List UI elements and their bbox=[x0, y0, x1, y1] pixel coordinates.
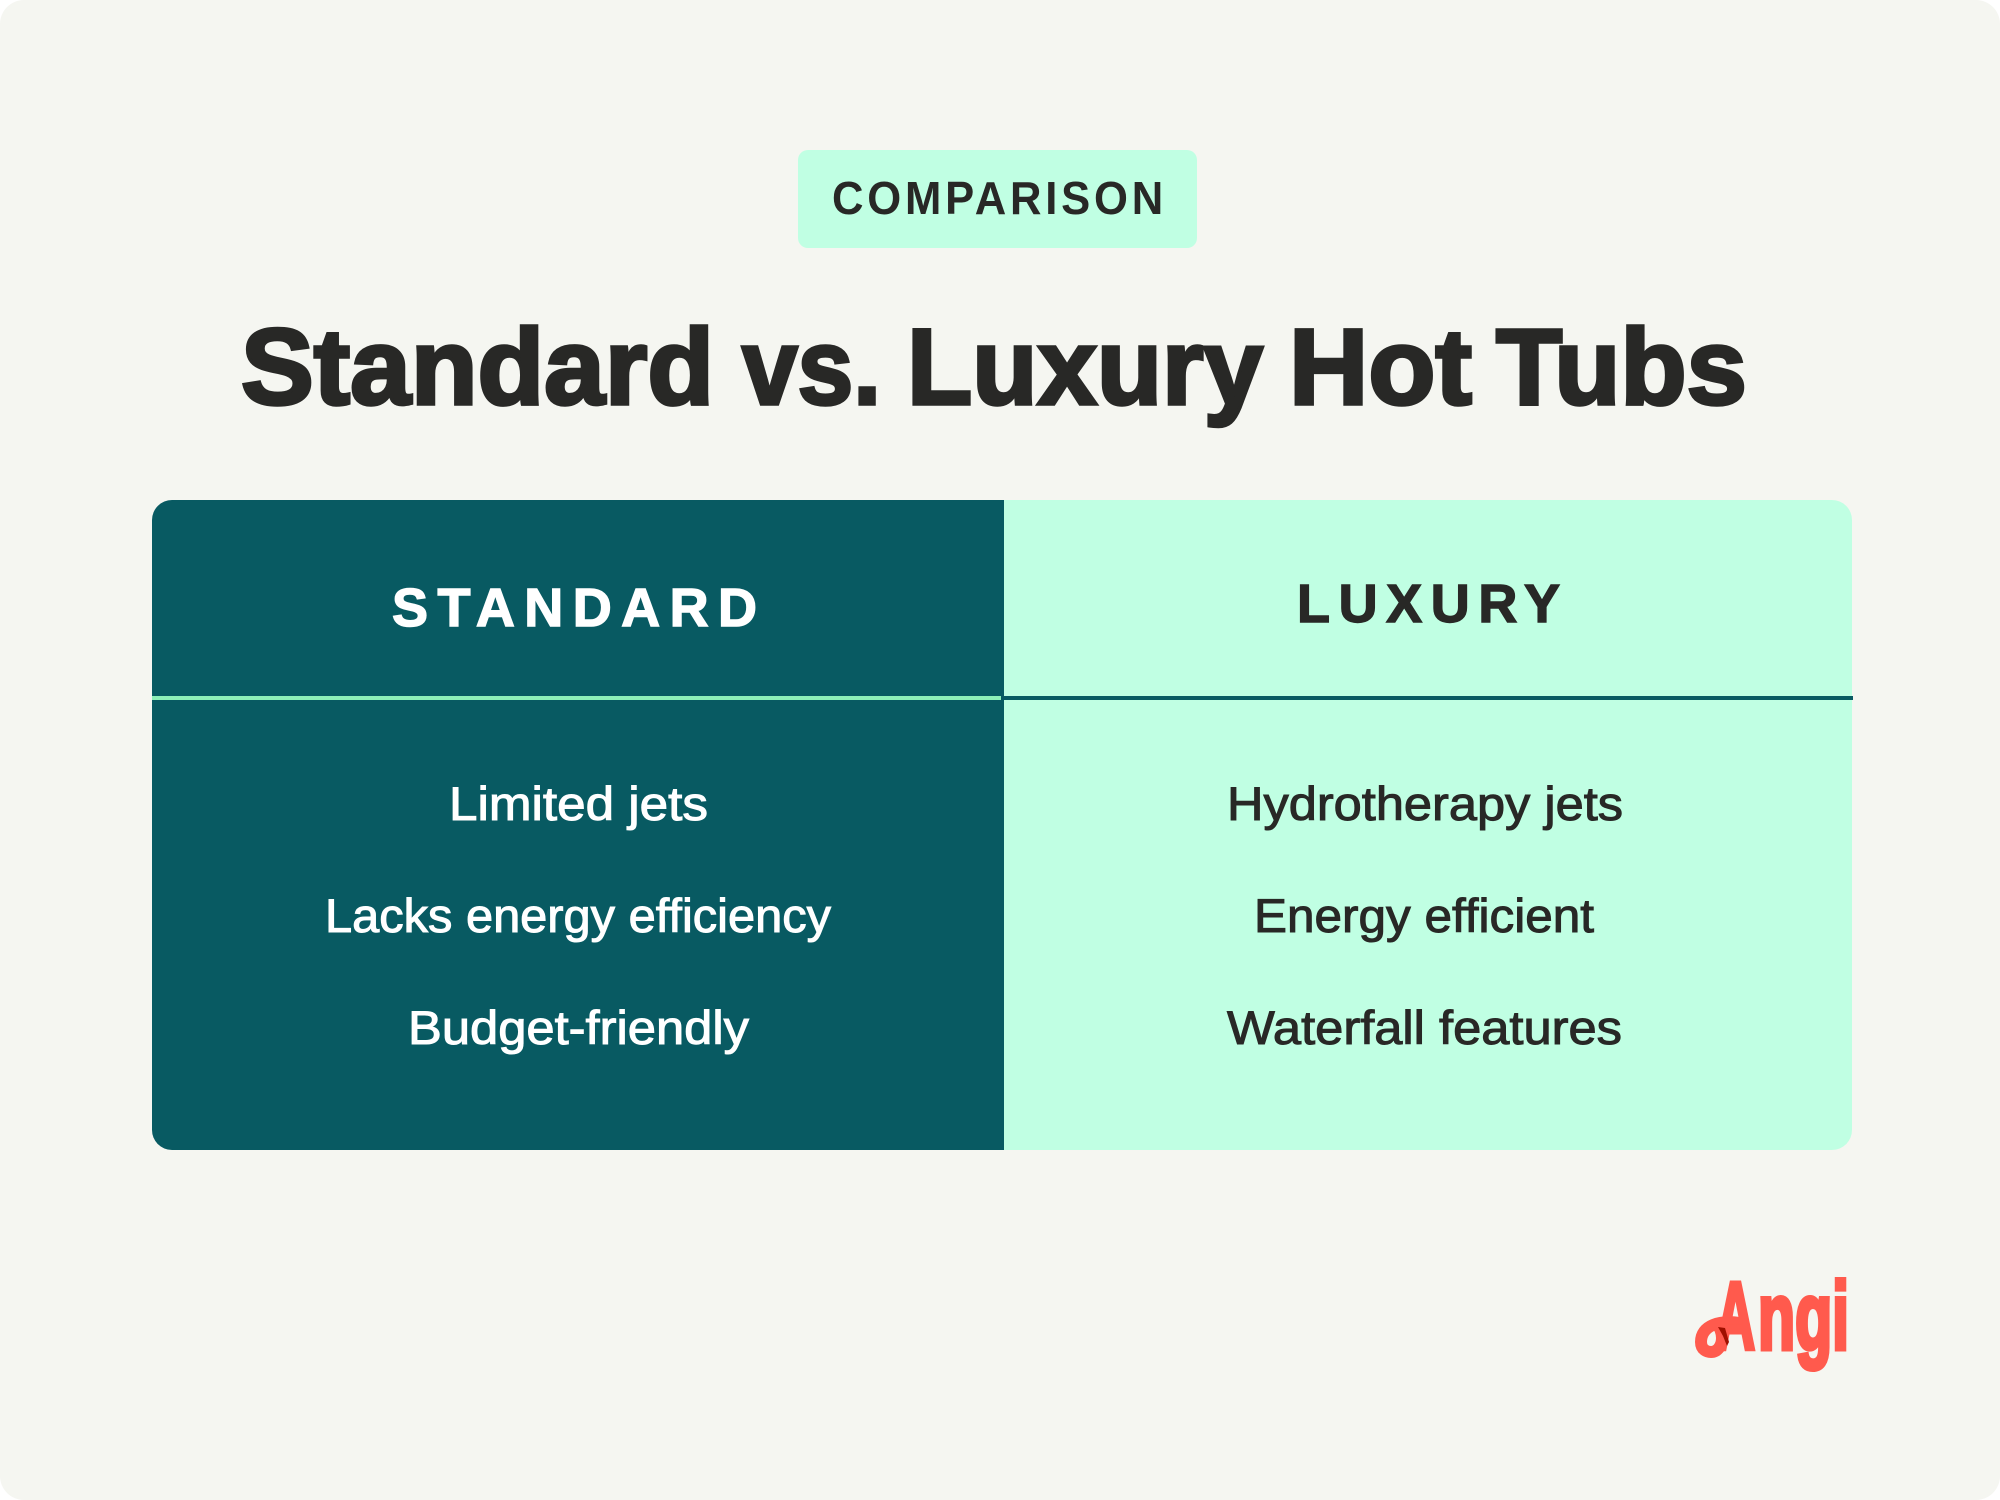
logo fold bbox=[1718, 1327, 1729, 1346]
title: Tubs bbox=[1496, 306, 1747, 427]
tag: comparison: COMPARISON bbox=[832, 172, 1167, 224]
logo wordmark A: A bbox=[1716, 1263, 1755, 1370]
title: vs. bbox=[742, 306, 881, 427]
logo wordmark ngi: ngi bbox=[1758, 1263, 1849, 1370]
list item: Limited jets bbox=[449, 777, 708, 830]
divider: luxury bbox=[1004, 696, 1853, 700]
title: Luxury bbox=[907, 306, 1263, 427]
list item: Hydrotherapy jets bbox=[1227, 777, 1623, 830]
logo loop bbox=[1701, 1322, 1740, 1352]
title: Hot bbox=[1289, 306, 1472, 427]
panel: standard bbox=[152, 500, 1004, 1150]
logo: Angi bbox=[1701, 1263, 1849, 1370]
divider: standard bbox=[152, 696, 1001, 700]
list item: Lacks energy efficiency bbox=[325, 889, 832, 942]
heading: standard: STANDARD bbox=[392, 578, 757, 638]
title: Standard bbox=[241, 306, 714, 427]
comparison table bbox=[152, 500, 1853, 1150]
panel: luxury bbox=[1004, 500, 1853, 1150]
list item: Budget-friendly bbox=[408, 1001, 750, 1054]
title bbox=[241, 306, 1747, 427]
tag: comparison bbox=[798, 150, 1197, 248]
heading: luxury: LUXURY bbox=[1297, 574, 1560, 634]
list item: Waterfall features bbox=[1227, 1001, 1622, 1054]
list item: Energy efficient bbox=[1254, 889, 1594, 942]
